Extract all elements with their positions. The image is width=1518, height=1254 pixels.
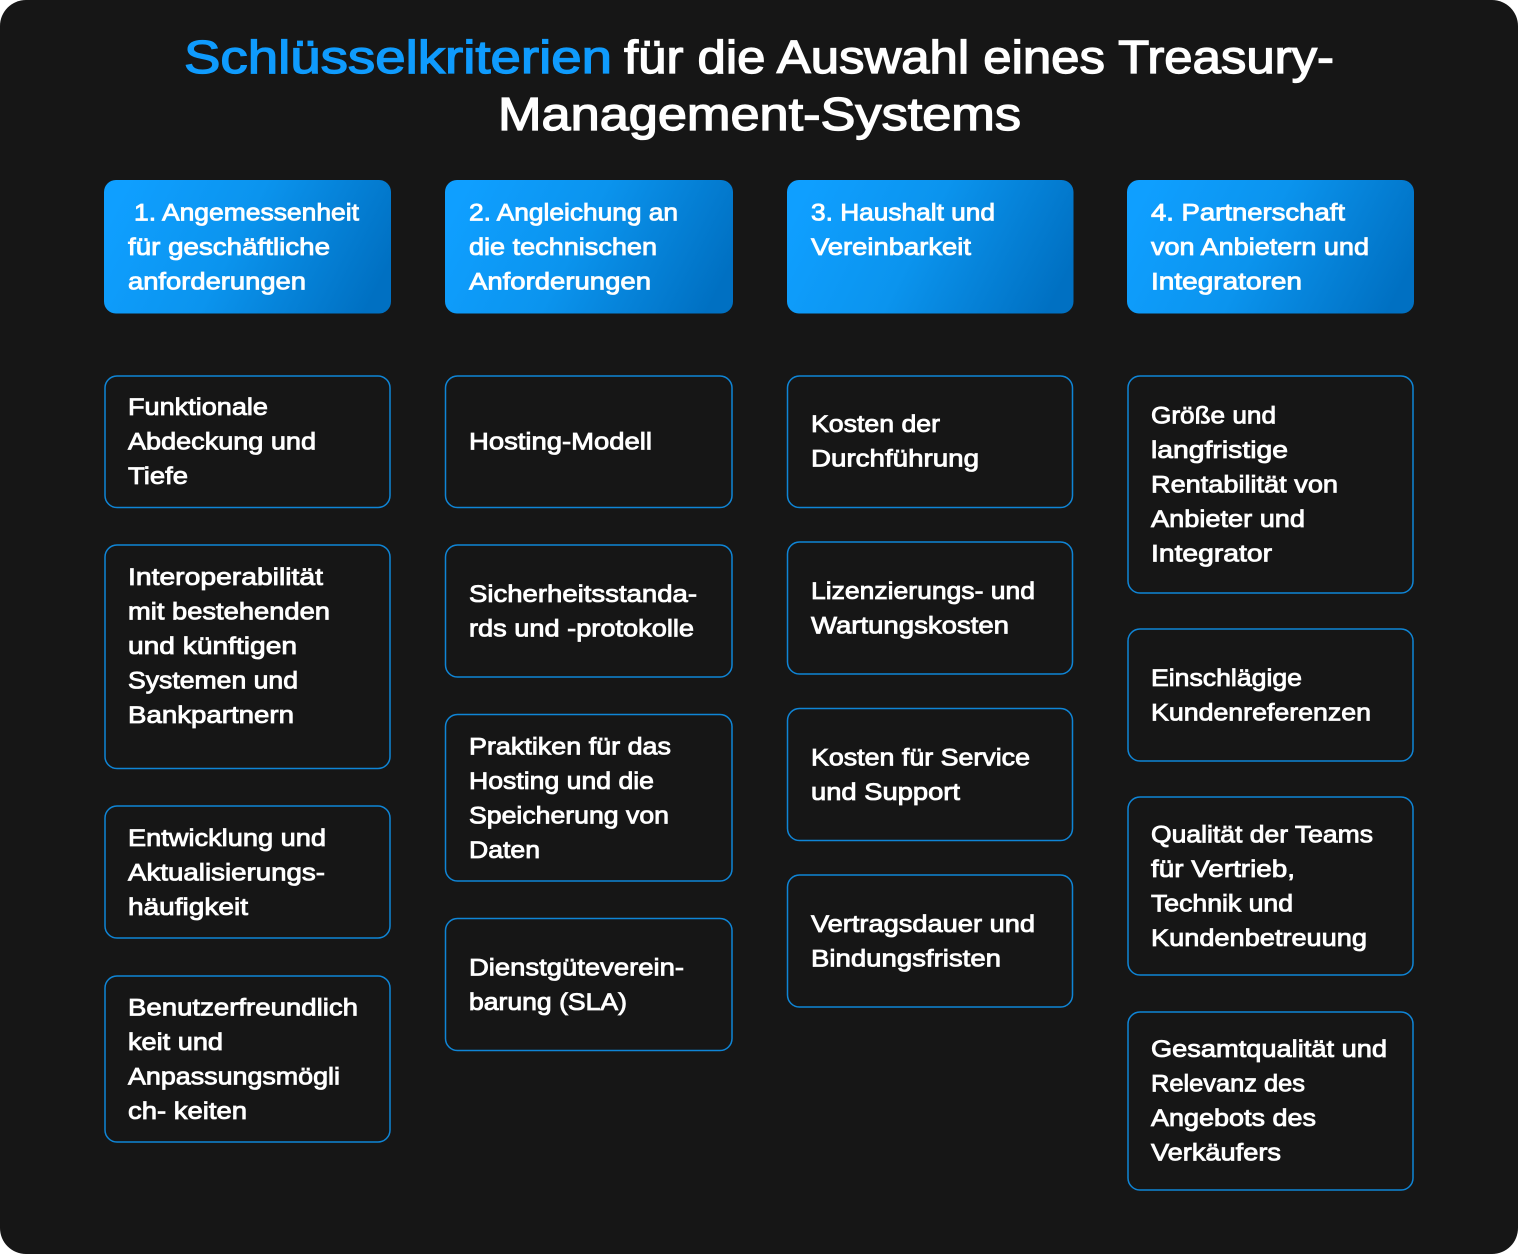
card: Entwicklung und Aktualisierungshäufigkeit: häufigkeit: [128, 894, 248, 921]
card: Größe und Rentabilität: Rentabilität von: [1151, 472, 1338, 499]
header: 2. Angleichung an die technischen Anforderungen: die technischen: [469, 234, 657, 261]
title: Schlüsselkriterien: [184, 31, 612, 83]
column 4: Partnerschaft: [1127, 180, 1414, 1190]
header: 4. Partnerschaft von Anbietern und Integratoren: Integratoren: [1151, 268, 1302, 296]
card: Größe und Rentabilität: Größe und: [1151, 403, 1276, 430]
header: 1. Angemessenheit für geschäftliche anforderungen: [104, 180, 391, 314]
card: Funktionale Abdeckung und Tiefe: [105, 376, 390, 508]
header: 3. Haushalt und Vereinbarkeit: 3. Haushalt und: [811, 200, 995, 226]
card: Hosting-Modell: Hosting-Modell: [469, 429, 652, 456]
card: Interoperabilität: Interoperabilität: [128, 564, 323, 591]
card: Kosten der Durchführung: Kosten der: [811, 411, 940, 438]
title: für die Auswahl eines Treasury-: [624, 31, 1334, 83]
card: Sicherheitsstandards: rds und -protokolle: [469, 616, 694, 643]
header: 4. Partnerschaft von Anbietern und Integratoren: [1127, 180, 1414, 314]
card: Interoperabilität: und künftigen: [128, 633, 297, 660]
card: Praktiken für Hosting und Speicherung: Hosting und die: [469, 768, 654, 795]
card: Benutzerfreundlichkeit: Anpassungsmögli: [128, 1064, 340, 1091]
header: 3. Haushalt und Vereinbarkeit: [787, 180, 1074, 314]
card: Funktionale Abdeckung und Tiefe: Abdeckung und: [128, 429, 316, 456]
card: Kosten für Service und Support: Kosten für Service: [811, 745, 1030, 772]
card: Kosten der Durchführung: [788, 376, 1072, 508]
card: Funktionale Abdeckung und Tiefe: Funktionale: [128, 394, 268, 421]
card: Funktionale Abdeckung und Tiefe: Tiefe: [128, 463, 188, 490]
card: Vertragsdauer und Bindungsfristen: [788, 875, 1072, 1007]
card: Benutzerfreundlichkeit: [105, 976, 390, 1142]
header: 3. Haushalt und Vereinbarkeit: Vereinbarkeit: [811, 234, 971, 261]
card: Gesamtqualität und Relevanz: Angebots des: [1151, 1105, 1316, 1132]
card: Gesamtqualität und Relevanz: Verkäufers: [1151, 1140, 1281, 1167]
card: Größe und Rentabilität: Integrator: [1151, 541, 1272, 568]
card: Qualität der Teams: [1128, 797, 1413, 975]
card: Qualität der Teams: Qualität der Teams: [1151, 822, 1373, 849]
card: Gesamtqualität und Relevanz: [1128, 1012, 1413, 1190]
card: Benutzerfreundlichkeit: keit und: [128, 1029, 223, 1056]
card: Größe und Rentabilität: Anbieter und: [1151, 506, 1305, 533]
header: 4. Partnerschaft von Anbietern und Integratoren: 4. Partnerschaft: [1151, 200, 1345, 226]
card: Praktiken für Hosting und Speicherung: Speicherung von: [469, 803, 669, 830]
card: Einschlägige Kundenreferenzen: Einschlägige: [1151, 665, 1302, 692]
card: Dienstgütevereinbarung: barung (SLA): [469, 989, 627, 1016]
column 3: Haushalt: [787, 180, 1074, 1007]
card: Sicherheitsstandards: Sicherheitsstanda-: [469, 581, 697, 608]
card: Hosting-Modell: [446, 376, 732, 508]
card: Größe und Rentabilität: [1128, 376, 1413, 593]
header: 2. Angleichung an die technischen Anforderungen: Anforderungen: [469, 268, 651, 296]
header: 2. Angleichung an die technischen Anforderungen: [445, 180, 733, 314]
card: Praktiken für Hosting und Speicherung: Daten: [469, 837, 540, 864]
header: 1. Angemessenheit für geschäftliche anforderungen: für geschäftliche: [128, 234, 330, 261]
column 2: technische Anforderungen: [445, 180, 733, 1050]
card: Dienstgütevereinbarung: [446, 918, 732, 1050]
card: Lizenzierungs- und Wartungskosten: Wartungskosten: [811, 613, 1009, 640]
card: Kosten für Service und Support: [788, 708, 1072, 840]
card: Interoperabilität: mit bestehenden: [128, 599, 330, 626]
card: Kosten der Durchführung: Durchführung: [811, 446, 979, 473]
card: Benutzerfreundlichkeit: ch- keiten: [128, 1098, 247, 1125]
card: Gesamtqualität und Relevanz: Relevanz des: [1151, 1071, 1305, 1098]
card: Entwicklung und Aktualisierungshäufigkeit: Entwicklung und: [128, 825, 326, 852]
column 1: Angemessenheit: [104, 180, 391, 1142]
card: Einschlägige Kundenreferenzen: Kundenreferenzen: [1151, 700, 1371, 727]
header: 1. Angemessenheit für geschäftliche anforderungen: anforderungen: [128, 268, 306, 296]
card: Vertragsdauer und Bindungsfristen: Vertragsdauer und: [811, 911, 1035, 938]
card: Vertragsdauer und Bindungsfristen: Bindungsfristen: [811, 946, 1001, 973]
header: 1. Angemessenheit für geschäftliche anforderungen: 1. Angemessenheit: [134, 200, 359, 226]
card: Lizenzierungs- und Wartungskosten: Lizenzierungs- und: [811, 578, 1035, 605]
card: Interoperabilität: Bankpartnern: [128, 702, 294, 729]
card: Interoperabilität: [105, 545, 390, 768]
card: Kosten für Service und Support: und Support: [811, 779, 960, 806]
card: Qualität der Teams: für Vertrieb,: [1151, 856, 1295, 883]
card: Gesamtqualität und Relevanz: Gesamtqualität und: [1151, 1036, 1387, 1063]
card: Sicherheitsstandards: [446, 545, 732, 677]
card: Interoperabilität: Systemen und: [128, 668, 298, 695]
card: Entwicklung und Aktualisierungshäufigkeit: [105, 806, 390, 938]
card: Größe und Rentabilität: langfristige: [1151, 437, 1288, 464]
card: Praktiken für Hosting und Speicherung: [446, 714, 732, 881]
title: Management-Systems: [498, 88, 1021, 140]
card: Einschlägige Kundenreferenzen: [1128, 629, 1413, 761]
card: Benutzerfreundlichkeit: Benutzerfreundlich: [128, 995, 358, 1022]
card: Qualität der Teams: Technik und: [1151, 891, 1293, 918]
title: [184, 31, 1334, 140]
header: 2. Angleichung an die technischen Anforderungen: 2. Angleichung an: [469, 200, 678, 226]
card: Entwicklung und Aktualisierungshäufigkeit: Aktualisierungs-: [128, 860, 325, 887]
card: Praktiken für Hosting und Speicherung: Praktiken für das: [469, 734, 671, 761]
header: 4. Partnerschaft von Anbietern und Integratoren: von Anbietern und: [1151, 234, 1369, 261]
card: Dienstgütevereinbarung: Dienstgüteverein-: [469, 955, 684, 982]
card: Lizenzierungs- und Wartungskosten: [788, 542, 1072, 674]
card: Qualität der Teams: Kundenbetreuung: [1151, 925, 1367, 952]
